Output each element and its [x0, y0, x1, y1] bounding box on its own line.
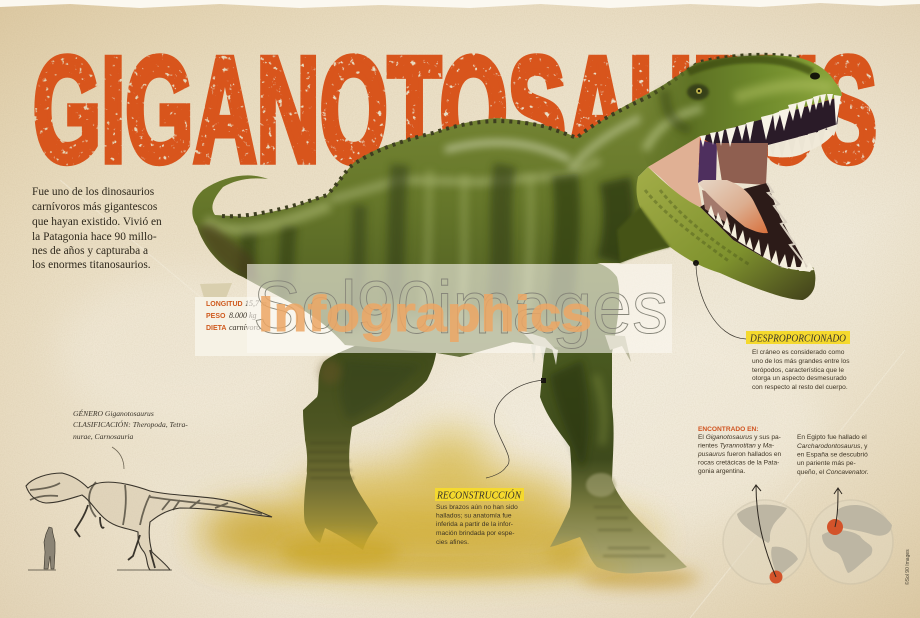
callout line: arms [486, 378, 546, 478]
mouth interior [648, 97, 840, 267]
found in text: rientes Tyrannotitan y Ma- [698, 442, 775, 450]
lower teeth [708, 205, 814, 271]
sketch human [44, 527, 55, 569]
watermark band: Sol90images [253, 266, 668, 349]
eye [687, 84, 709, 100]
fact card: 8.000 kg [229, 311, 257, 320]
found in text: un pariente más pe- [797, 460, 856, 467]
callout: desproporcionado: con respecto al resto del cuerpo. [752, 384, 848, 391]
credit: ©Sol 90 Images [904, 549, 911, 585]
intro text [32, 186, 162, 271]
found in text: rocas cretácicas de la Pata- [698, 460, 779, 466]
lower jaw [637, 167, 815, 300]
nostril [810, 72, 820, 80]
dinosaur illustration [180, 55, 842, 575]
callout: desproporcionado: DESPROPORCIONADO [749, 334, 846, 344]
intro text: la Patagonia hace 90 millo- [32, 231, 157, 243]
fact card: DIETA [206, 325, 226, 332]
intro text: nes de años y capturaba a [32, 245, 148, 257]
globe: Africa and Europe [809, 500, 893, 584]
found in text: En Egipto fue hallado el [797, 434, 867, 441]
found in text: El Giganotosaurus y sus pa- [698, 434, 781, 441]
intro text: carnívoros más gigantescos [32, 201, 158, 213]
arms and claws [520, 330, 631, 365]
intro text: los enormes titanosaurios. [32, 259, 151, 271]
callout line: head [693, 260, 746, 339]
sketch notes: nurae, Carnosauria [73, 432, 134, 441]
dust over the feet [250, 536, 630, 575]
right leg [540, 345, 687, 573]
found in text: Carcharodontosaurus, y [797, 443, 868, 450]
callout: desproporcionado: otorga un aspecto desmesurado [752, 375, 847, 382]
fact card: 15,7 m [245, 299, 267, 308]
far upper teeth [769, 124, 838, 158]
intro text: que hayan existido. Vivió en [32, 216, 162, 228]
callout: desproporcionado: terópodos, característica que le [752, 367, 844, 374]
sketch notes [73, 408, 188, 469]
sketch notes: CLASIFICACIÓN: Theropoda, Tetra- [73, 419, 188, 429]
found in text: queño, el Concavenator. [797, 469, 869, 476]
found in text: ENCONTRADO EN: [698, 426, 758, 433]
fact card: carnívoro [229, 323, 260, 332]
dust cloud behind the dinosaur [200, 426, 700, 588]
sketch dinosaur [26, 473, 272, 570]
head upper jaw [638, 55, 842, 167]
callout: reconstruccion: Sus brazos aún no han sido [436, 504, 518, 511]
fact card: LONGITUD [206, 301, 243, 308]
callout: reconstruccion [435, 488, 524, 546]
found in text: gonia argentina. [698, 468, 745, 475]
found in text: en España se descubrió [797, 452, 868, 458]
fact card: PESO [206, 313, 226, 320]
torso and tail [192, 63, 697, 357]
callout: reconstruccion: mación brindada por espe- [436, 530, 514, 537]
callout: reconstruccion: hallados; su anatomía fue [436, 512, 512, 520]
callout: desproporcionado: uno de los más grandes entre los [752, 358, 850, 365]
sketch: dinosaur and human scale [26, 473, 272, 570]
intro text: Fue uno de los dinosaurios [32, 186, 155, 198]
callout: desproporcionado: El cráneo es considerado como [752, 349, 845, 356]
left leg [303, 345, 437, 550]
upper teeth [700, 94, 841, 147]
callout: desproporcionado [746, 331, 850, 391]
watermark band: Infographics [258, 286, 592, 342]
map marker and arrow: Patagonia [752, 485, 782, 584]
found in text: pusaurus fueron hallados en [697, 451, 782, 458]
callout: reconstruccion: inferida a partir de la infor- [436, 521, 513, 528]
globe: Americas [723, 500, 807, 584]
callout: reconstruccion: RECONSTRUCCIÓN [436, 490, 522, 502]
dorsal spikes [222, 55, 800, 216]
callout: reconstruccion: cies afines. [436, 539, 469, 546]
found in text [697, 426, 869, 476]
map marker and arrow: Egypt [827, 488, 843, 535]
sketch notes: GÉNERO Giganotosaurus [73, 408, 154, 418]
fact card [195, 283, 365, 356]
